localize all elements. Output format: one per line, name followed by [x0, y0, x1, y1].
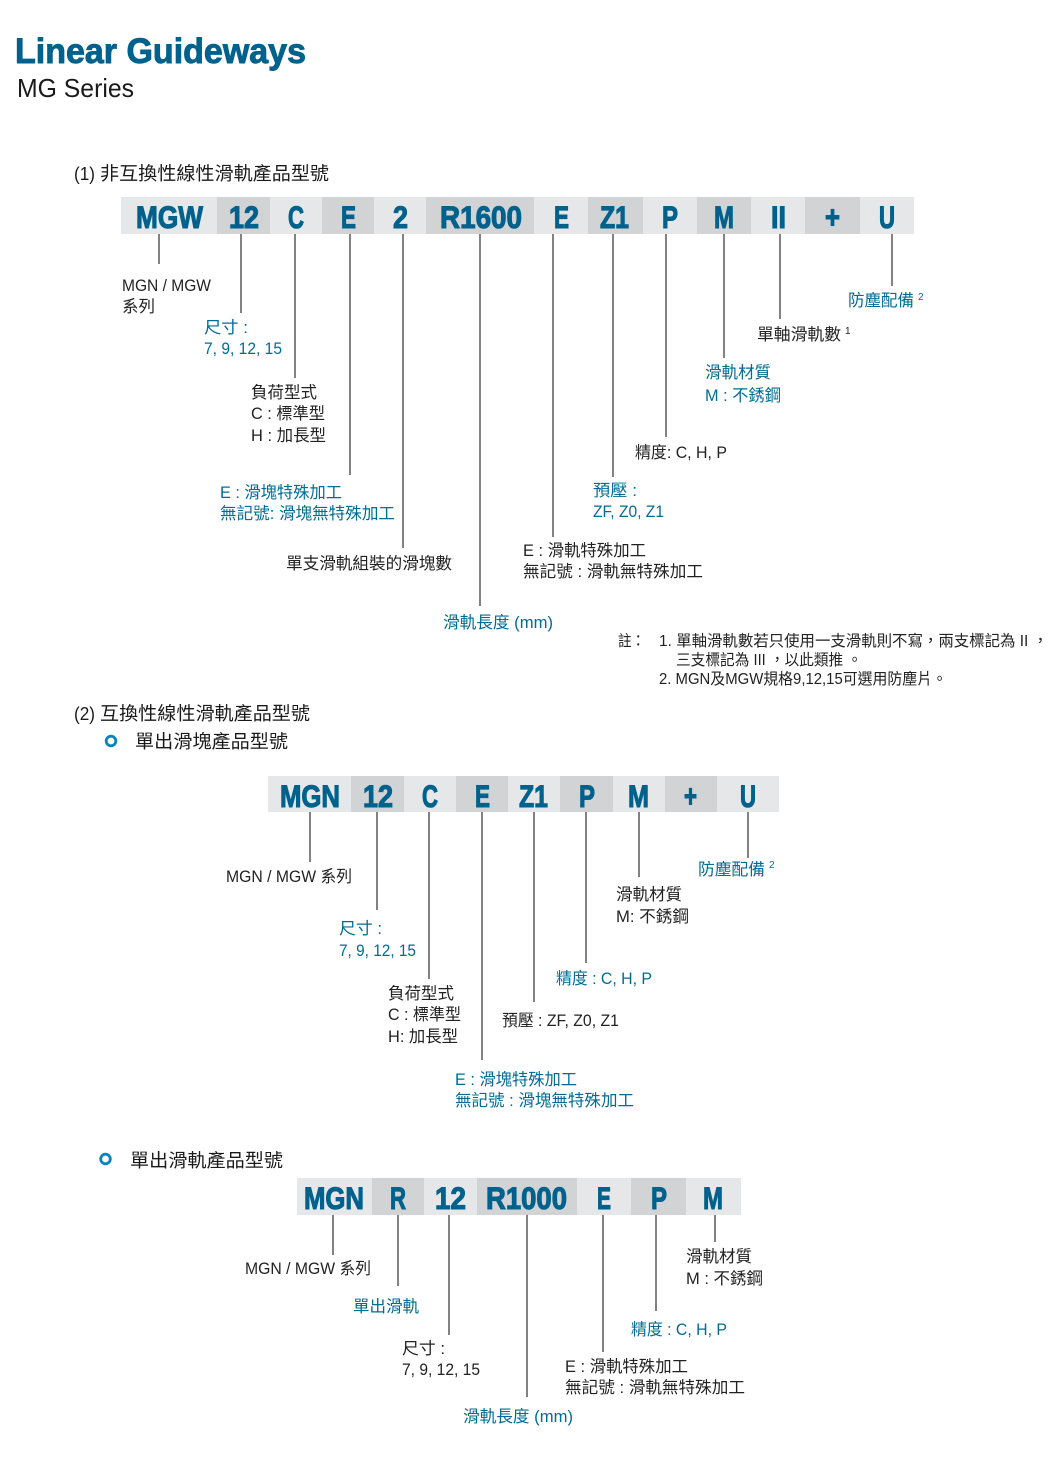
model code bar: R — [390, 1180, 406, 1216]
model code bar — [121, 197, 914, 235]
model code bar: E — [475, 778, 490, 814]
callout: block custom processing: E : 滑塊特殊加工 — [220, 483, 342, 502]
callout: rail material: 滑軌材質 — [705, 363, 771, 382]
callout: rail material: 滑軌材質 — [686, 1247, 752, 1266]
model code bar: R1600 — [440, 199, 522, 235]
callout: rail custom processing: 無記號 : 滑軌無特殊加工 — [523, 562, 703, 581]
panel: non-interchangeable model code diagram — [121, 197, 924, 632]
callout: dust protection: 防塵配備 — [848, 291, 914, 310]
callout: size — [402, 1215, 480, 1379]
model code bar: E — [597, 1180, 611, 1216]
callout: series — [245, 1215, 371, 1278]
notes: 註： — [618, 632, 645, 650]
callout: load type: H : 加長型 — [251, 426, 326, 445]
panel: single rail model code diagram — [245, 1178, 763, 1426]
callout: preload: ZF, Z0, Z1 — [593, 503, 664, 521]
model code bar: R1000 — [486, 1180, 567, 1216]
callout: single rail: 單出滑軌 — [353, 1297, 420, 1316]
callout: dust protection: 2 — [769, 860, 775, 871]
panel: single block model code diagram — [226, 776, 779, 1110]
heading: section 1: (1) — [74, 163, 95, 184]
callout: dust protection: 2 — [918, 292, 924, 303]
notes: 2. MGN及MGW規格9,12,15可選用防塵片。 — [659, 670, 947, 688]
callout: block custom processing: E : 滑塊特殊加工 — [455, 1070, 577, 1089]
model code bar: C — [422, 778, 438, 814]
callout: block custom processing: 無記號: 滑塊無特殊加工 — [220, 504, 395, 523]
callout: rail custom processing — [523, 234, 703, 581]
model code bar: 12 — [363, 778, 393, 814]
sub-heading: single rail: 單出滑軌產品型號 — [130, 1150, 283, 1171]
model code bar: M — [703, 1180, 723, 1216]
callout: preload: 預壓 : ZF, Z0, Z1 — [502, 1011, 619, 1030]
callout: rail material: M : 不銹鋼 — [705, 386, 781, 405]
callout: preload: 預壓 : — [593, 481, 637, 500]
callout: size: 尺寸 : — [339, 919, 382, 938]
callout: rails per axis: 1 — [845, 326, 851, 337]
callout: block custom processing — [455, 812, 634, 1110]
callout: size: 尺寸 : — [204, 318, 248, 337]
callout: series: MGN / MGW 系列 — [245, 1259, 371, 1278]
heading: section 1: 非互換性線性滑軌產品型號 — [100, 163, 329, 184]
callout: size — [204, 234, 282, 358]
callout: rail material: M : 不銹鋼 — [686, 1269, 763, 1288]
callout: block custom processing: 無記號 : 滑塊無特殊加工 — [455, 1091, 634, 1110]
model code bar: 12 — [435, 1180, 466, 1216]
model code bar: U — [740, 778, 756, 814]
callout: load type — [251, 234, 326, 445]
heading: section 2: 互換性線性滑軌產品型號 — [100, 703, 310, 724]
model code bar: MGW — [136, 199, 203, 235]
callout: rail length: 滑軌長度 (mm) — [463, 1407, 573, 1426]
callout: series: 系列 — [122, 297, 155, 316]
callout: load type: C : 標準型 — [388, 1005, 461, 1024]
callout: blocks per rail: 單支滑軌組裝的滑塊數 — [286, 554, 452, 573]
callout: rail material — [686, 1215, 763, 1288]
callout: rail custom processing: 無記號 : 滑軌無特殊加工 — [565, 1378, 745, 1397]
callout: dust protection: 防塵配備 — [698, 860, 765, 879]
callout: dust protection — [848, 234, 924, 310]
title: Linear Guideways — [15, 32, 306, 71]
callout: series — [122, 234, 211, 316]
callout: rail custom processing: E : 滑軌特殊加工 — [523, 541, 646, 560]
notes: 1. 單軸滑軌數若只使用一支滑軌則不寫，兩支標記為 II ， — [659, 632, 1048, 650]
callout: series: MGN / MGW 系列 — [226, 867, 352, 886]
callout: preload — [593, 234, 664, 521]
model code bar — [297, 1178, 741, 1216]
heading: section 2: (2) — [74, 703, 95, 724]
callout: series: MGN / MGW — [122, 277, 211, 295]
model code bar: MGN — [304, 1180, 364, 1216]
callout: load type — [388, 812, 461, 1046]
model code bar: U — [879, 199, 895, 235]
model code bar: P — [651, 1180, 667, 1216]
callout: rails per axis: 單軸滑軌數 — [757, 325, 841, 344]
model code bar: Z1 — [600, 199, 629, 235]
callout: size — [339, 812, 416, 960]
callout: accuracy: 精度: C, H, P — [635, 443, 727, 462]
callout: rail material: 滑軌材質 — [616, 885, 682, 904]
callout: rail material — [705, 234, 781, 405]
callout: rail custom processing — [565, 1215, 745, 1397]
model code bar: P — [662, 199, 678, 235]
model code bar: M — [628, 778, 649, 814]
model code bar: II — [771, 199, 786, 235]
sub-heading: single block: 單出滑塊產品型號 — [135, 731, 288, 752]
callout: size: 7, 9, 12, 15 — [402, 1361, 480, 1379]
callout: size: 7, 9, 12, 15 — [339, 942, 416, 960]
callout: rails per axis — [757, 234, 851, 344]
callout: load type: 負荷型式 — [388, 984, 454, 1003]
callout: block custom processing — [220, 234, 395, 523]
model code bar: 2 — [393, 199, 408, 235]
model code bar: P — [579, 778, 595, 814]
callout: single rail — [353, 1215, 420, 1316]
callout: load type: H: 加長型 — [388, 1027, 458, 1046]
callout: rail material: M: 不銹鋼 — [616, 907, 689, 926]
callout: accuracy: 精度 : C, H, P — [556, 969, 652, 988]
callout: dust protection — [698, 812, 775, 879]
callout: size: 7, 9, 12, 15 — [204, 340, 282, 358]
model code bar: C — [288, 199, 304, 235]
model code bar: E — [554, 199, 569, 235]
callout: rail length: 滑軌長度 (mm) — [443, 613, 553, 632]
model code bar: + — [825, 199, 840, 235]
callout: rail custom processing: E : 滑軌特殊加工 — [565, 1357, 688, 1376]
callout: series — [226, 812, 352, 886]
callout: load type: C : 標準型 — [251, 404, 325, 423]
subtitle: MG Series — [17, 73, 134, 103]
model code bar: E — [341, 199, 356, 235]
model code bar: + — [684, 778, 697, 814]
callout: load type: 負荷型式 — [251, 383, 317, 402]
model code bar — [268, 776, 779, 814]
callout: rail material — [616, 812, 689, 926]
notes — [618, 632, 1048, 688]
callout: accuracy — [631, 1215, 727, 1339]
notes: 三支標記為 III ，以此類推 。 — [676, 651, 862, 669]
model code bar: Z1 — [519, 778, 548, 814]
callout: size: 尺寸 : — [402, 1339, 445, 1358]
callout: accuracy: 精度 : C, H, P — [631, 1320, 727, 1339]
model code bar: M — [714, 199, 734, 235]
model code bar: 12 — [229, 199, 259, 235]
model code bar: MGN — [280, 778, 340, 814]
